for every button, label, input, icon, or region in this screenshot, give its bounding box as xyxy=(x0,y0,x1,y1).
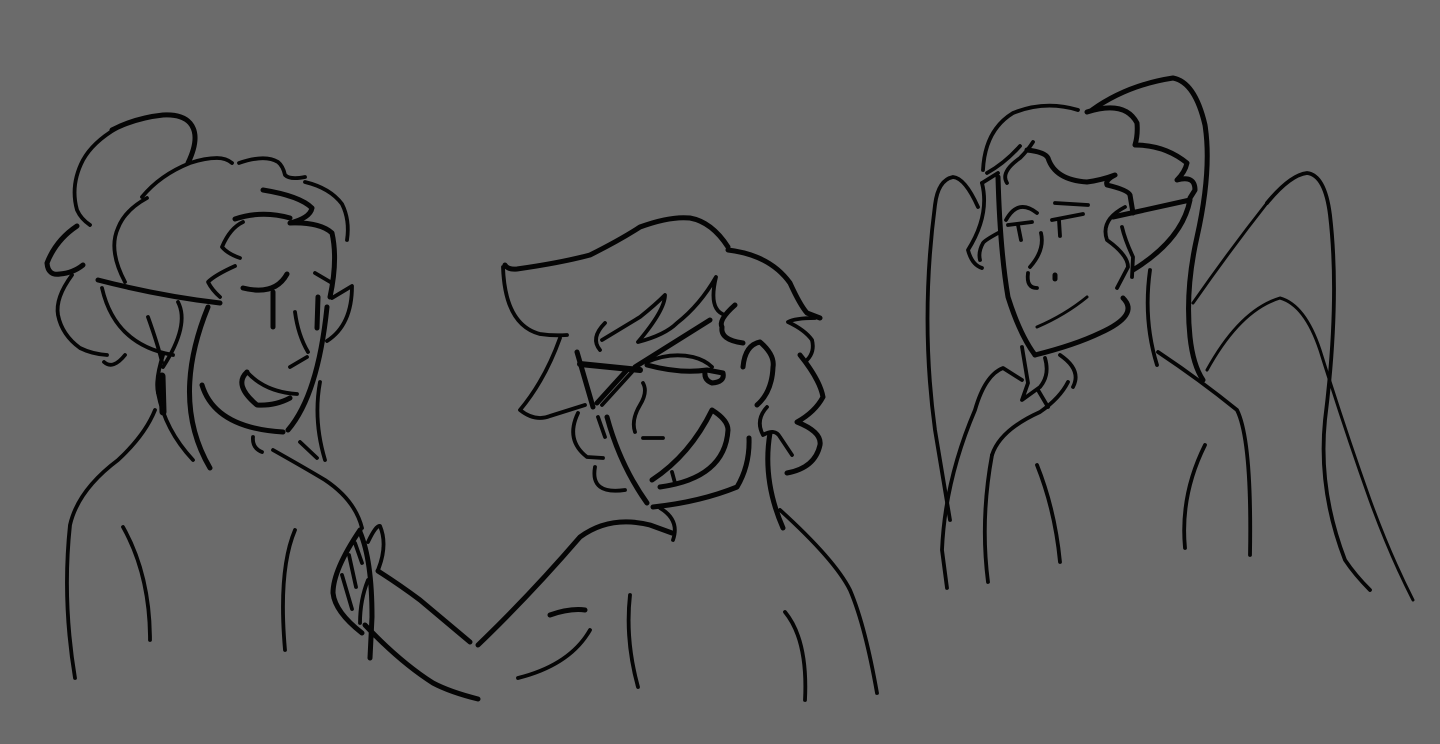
wings xyxy=(928,173,1413,600)
pointed ear, left xyxy=(98,280,220,367)
figure: middle character with glasses xyxy=(478,218,877,700)
hair xyxy=(968,106,1195,288)
face xyxy=(202,273,352,452)
figure: right elf with wings and ponytail xyxy=(928,78,1413,600)
glasses and eyes xyxy=(577,320,723,407)
torso xyxy=(67,410,362,678)
collar, neck and torso xyxy=(942,270,1250,588)
hair xyxy=(114,158,348,460)
hair xyxy=(503,218,823,491)
face xyxy=(598,342,773,507)
hair bun xyxy=(47,115,195,365)
hand resting on shoulder xyxy=(333,526,478,699)
neck, collar and torso xyxy=(478,433,877,700)
pointed ear, right xyxy=(1113,200,1190,270)
figure: left elf with hair bun xyxy=(47,115,362,678)
neck strands xyxy=(148,307,210,468)
face xyxy=(998,177,1128,355)
ponytail xyxy=(1092,78,1207,380)
